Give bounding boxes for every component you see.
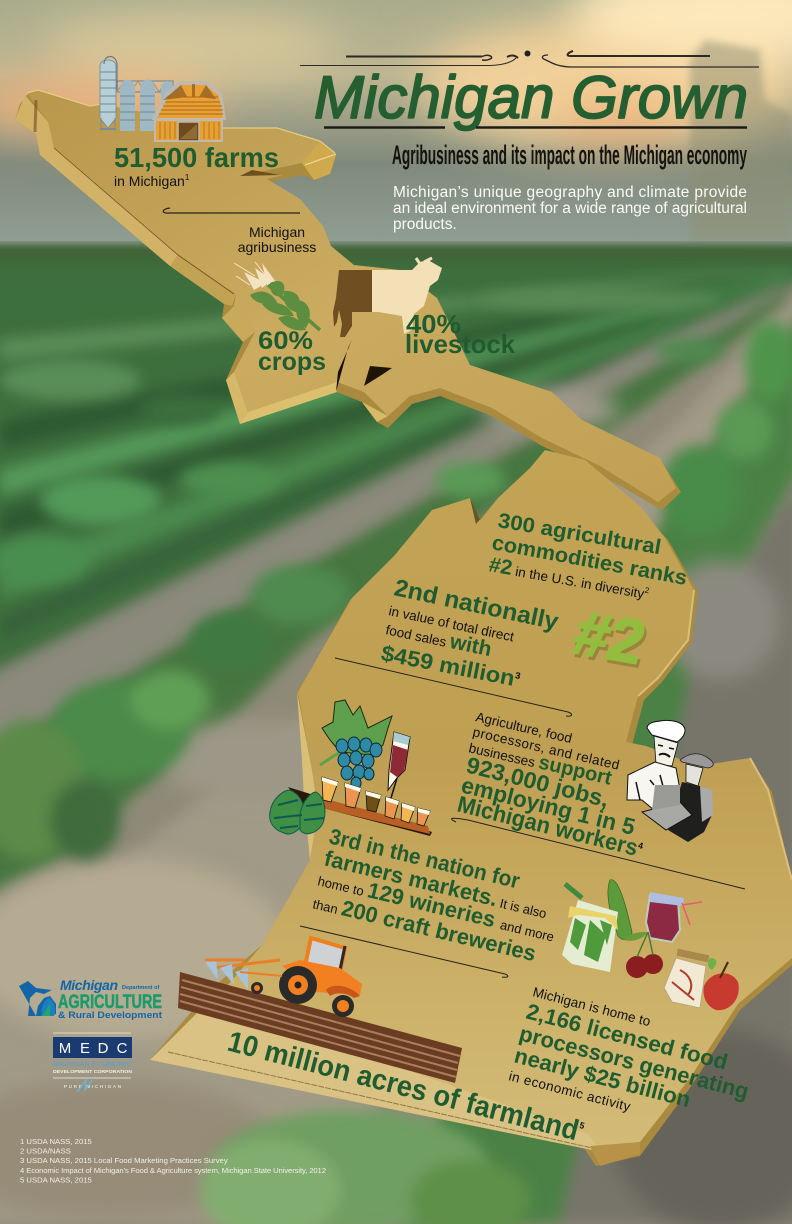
- crops stat: crops: [258, 348, 326, 376]
- livestock stat: [405, 309, 516, 359]
- plant row B: [0, 292, 790, 900]
- farms stat: 1: [185, 173, 190, 182]
- icon: plow: [205, 958, 280, 990]
- logo: MEDC: D: [98, 1040, 109, 1057]
- intro text: products.: [393, 216, 457, 233]
- lower peninsula text: commodities: 2: [644, 586, 650, 595]
- farms stat: in Michigan: [114, 173, 185, 189]
- crops stat: [258, 327, 326, 376]
- food processors text: in economic activity: [507, 1068, 632, 1114]
- food processors text: [507, 984, 751, 1114]
- icon: cow: [333, 258, 442, 337]
- lower peninsula text: commodities: [487, 509, 689, 604]
- icon: tractor: [240, 938, 362, 1017]
- title: Michigan Grown: [314, 64, 748, 131]
- farmers markets text: [311, 824, 557, 966]
- icon: soil field: [178, 972, 462, 1083]
- lower peninsula text: commodities: commodities ranks: [490, 531, 689, 590]
- map: lower peninsula: [150, 450, 792, 1166]
- footnotes: [20, 1137, 326, 1184]
- farmers markets text: farmers markets. It is also: [322, 846, 550, 923]
- direct food sales: food sales with: [384, 616, 494, 661]
- field base: [0, 244, 792, 274]
- footnotes: 4 Economic Impact of Michigan’s Food & Agriculture system, Michigan State University, 2012: [20, 1166, 326, 1175]
- divider upper peninsula: [163, 208, 300, 213]
- agriculture jobs text: processors, and related: [471, 724, 621, 773]
- icon: grapes and wine: [320, 700, 410, 798]
- crops stat: 60%: [258, 327, 313, 355]
- icon: silos: [100, 56, 174, 131]
- logo: Michigan Department of Agriculture: AGRICULTURE: [58, 992, 162, 1013]
- soil stripe 1: [0, 286, 785, 770]
- farmers markets text: than 200 craft breweries: [311, 889, 539, 966]
- direct food sales: 3: [514, 670, 521, 681]
- footnotes: 2 USDA/NASS: [20, 1146, 71, 1156]
- food processors text: Michigan is home to: [531, 984, 652, 1029]
- logo: MEDC: [53, 1033, 133, 1092]
- agriculture jobs text: employing 1 in 5: [459, 772, 638, 840]
- divider 1: [335, 658, 572, 716]
- divider 2: [452, 818, 745, 889]
- agriculture jobs text: 923,000 jobs,: [464, 752, 612, 812]
- icon: jam jar: [646, 892, 702, 942]
- icon: beer flight: [288, 777, 432, 836]
- logo: MEDC: M: [59, 1040, 71, 1057]
- plant clusters: [0, 288, 792, 1224]
- farmers markets text: 3rd in the nation for: [327, 824, 523, 893]
- agriculture jobs text: 4: [637, 840, 644, 851]
- logo: MEDC: E: [80, 1040, 90, 1057]
- icon: barn: [152, 81, 226, 141]
- logo: MEDC: C: [117, 1040, 128, 1057]
- icon: chef and farmer: [627, 720, 713, 842]
- soil stripe 3, right: [560, 480, 792, 1224]
- big #2: #2: [569, 602, 654, 681]
- agriculture jobs text: Michigan workers: [455, 791, 650, 863]
- farmers markets text: home to 129 wineries and more: [316, 866, 557, 946]
- header ornament: [300, 50, 759, 67]
- soil stripe 2: [0, 290, 792, 1224]
- map: upper peninsula: [15, 90, 681, 510]
- food processors text: 2,166 licensed food: [524, 999, 730, 1075]
- icon: cherries: [624, 932, 663, 978]
- food processors text: processors generating: [517, 1021, 751, 1104]
- agribusiness label: agribusiness: [238, 239, 316, 255]
- agriculture jobs text: businesses support: [467, 735, 614, 790]
- direct food sales: 2nd nationally: [392, 574, 561, 636]
- soil patches: [0, 390, 792, 1224]
- farmland text: 10 million acres of farmland: [224, 1026, 604, 1153]
- direct food sales: $459 million: [379, 640, 507, 689]
- footnotes: 5 USDA NASS, 2015: [20, 1176, 92, 1184]
- logo: Michigan Department of Agriculture: Michigan: [60, 977, 118, 993]
- icon: wheat: [234, 262, 320, 330]
- logo: MEDC: PURE MICHIGAN: [64, 1084, 121, 1089]
- agriculture jobs text: Agriculture, food: [474, 709, 573, 746]
- big #2: #2: [566, 599, 652, 678]
- icon: hops: [270, 790, 325, 834]
- livestock stat: livestock: [405, 329, 516, 359]
- agriculture jobs text: [455, 709, 645, 862]
- direct food sales: in value of total direct: [387, 603, 516, 645]
- farms stat: [114, 142, 279, 189]
- farmland text: 5: [579, 1120, 586, 1131]
- agribusiness label: Michigan: [249, 224, 305, 240]
- livestock stat: 40%: [406, 309, 461, 339]
- logo: Michigan Department of Agriculture: [19, 977, 162, 1020]
- logo: MEDC: MICHIGAN ECONOMIC: [53, 1061, 132, 1068]
- intro text: an ideal environment for a wide range of agricultural: [393, 200, 747, 217]
- icon: apple jar and apple: [664, 949, 739, 1010]
- farms stat: 51,500 farms: [114, 142, 279, 173]
- direct food sales: [379, 574, 561, 692]
- agribusiness label: [238, 224, 316, 255]
- logo: Michigan Department of Agriculture: & Rural Development: [58, 1010, 162, 1020]
- lower peninsula text: commodities: #2 in the U.S. in diversity: [487, 553, 645, 601]
- intro text: Michigan’s unique geography and climate provide: [393, 184, 747, 201]
- footnotes: 1 USDA NASS, 2015: [20, 1137, 92, 1146]
- footnotes: 3 USDA NASS, 2015 Local Food Marketing Practices Survey: [20, 1156, 228, 1165]
- icon: pickles jar: [562, 880, 632, 972]
- intro text: [393, 184, 747, 233]
- lower peninsula text: commodities: 300 agricultural: [496, 509, 663, 559]
- title underline: [324, 126, 747, 129]
- plant row C: [400, 310, 792, 1224]
- food processors text: nearly $25 billion: [512, 1043, 693, 1112]
- logo: MEDC: DEVELOPMENT CORPORATION: [53, 1069, 133, 1075]
- divider 3: [300, 926, 508, 977]
- logo: Michigan Department of Agriculture: Department of: [122, 985, 159, 991]
